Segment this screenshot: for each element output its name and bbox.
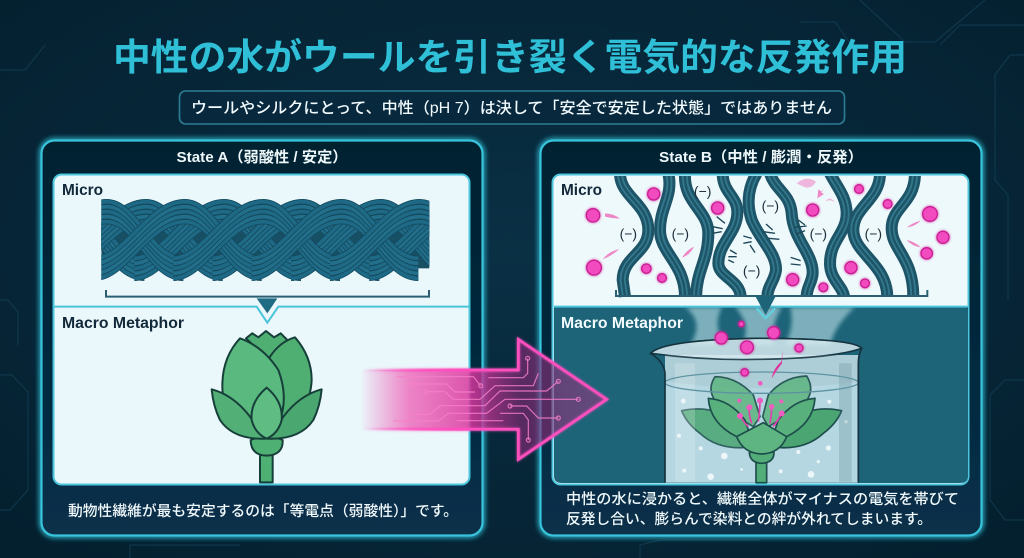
panel B micro label: Micro xyxy=(561,182,602,199)
rope of twisted fibers xyxy=(101,199,430,298)
panel A micro label: Micro xyxy=(62,182,103,199)
panel A illustration card xyxy=(54,174,470,484)
panel B illustration card xyxy=(552,174,968,484)
pink ions and motion marks: (−) xyxy=(762,197,779,213)
beaker with flower in water xyxy=(651,321,862,483)
water bubbles xyxy=(677,399,848,480)
pink ions and motion marks: (−) xyxy=(743,263,760,279)
glass highlights xyxy=(675,363,695,482)
flower stamens xyxy=(740,400,782,427)
pink ions and motion marks: (−) xyxy=(672,226,689,242)
separated swollen fibers xyxy=(620,173,915,297)
macro background xyxy=(554,307,968,483)
subtitle box: ウールやシルクにとって、中性（pH 7）は決して「安全で安定した状態」ではありません xyxy=(191,98,832,117)
panel B caption: 反発し合い、膨らんで染料との絆が外れてしまいます。 xyxy=(566,510,932,528)
panel A caption: 動物性繊維が最も安定するのは「等電点（弱酸性）」です。 xyxy=(68,502,458,520)
panel A heading: State A（弱酸性 / 安定） xyxy=(176,148,348,166)
arrow circuit traces xyxy=(393,356,580,442)
water xyxy=(665,382,858,483)
panel: State B xyxy=(540,140,982,536)
panel B caption xyxy=(566,490,959,528)
panel B macro label: Macro Metaphor xyxy=(561,315,683,332)
pink ions and motion marks: (−) xyxy=(865,226,882,242)
pink ions and motion marks: (−) xyxy=(810,226,827,242)
beaker body xyxy=(665,355,858,483)
pink ions and motion marks: (−) xyxy=(694,183,711,199)
panel: State A xyxy=(35,134,489,542)
rising ions xyxy=(715,321,803,376)
panel A macro label: Macro Metaphor xyxy=(62,315,184,332)
panel A frame xyxy=(42,140,482,536)
icon: closed flower bud xyxy=(212,331,322,482)
subtitle box xyxy=(180,91,844,124)
steam xyxy=(685,307,855,345)
panel B caption: 中性の水に浸かると、繊維全体がマイナスの電気を帯びて xyxy=(566,490,959,508)
arrow: state A to state B xyxy=(362,339,607,459)
beaker outline xyxy=(651,338,862,483)
title: 中性の水がウールを引き裂く電気的な反発作用 xyxy=(113,37,907,78)
pink ions and motion marks xyxy=(586,179,949,296)
flower xyxy=(682,376,842,483)
panel B frame xyxy=(540,140,982,536)
panel B heading: State B（中性 / 膨潤・反発） xyxy=(659,148,863,166)
pink ions and motion marks: (−) xyxy=(620,226,637,242)
divider with pointer xyxy=(54,298,469,323)
panel B divider with pointer xyxy=(554,296,967,318)
